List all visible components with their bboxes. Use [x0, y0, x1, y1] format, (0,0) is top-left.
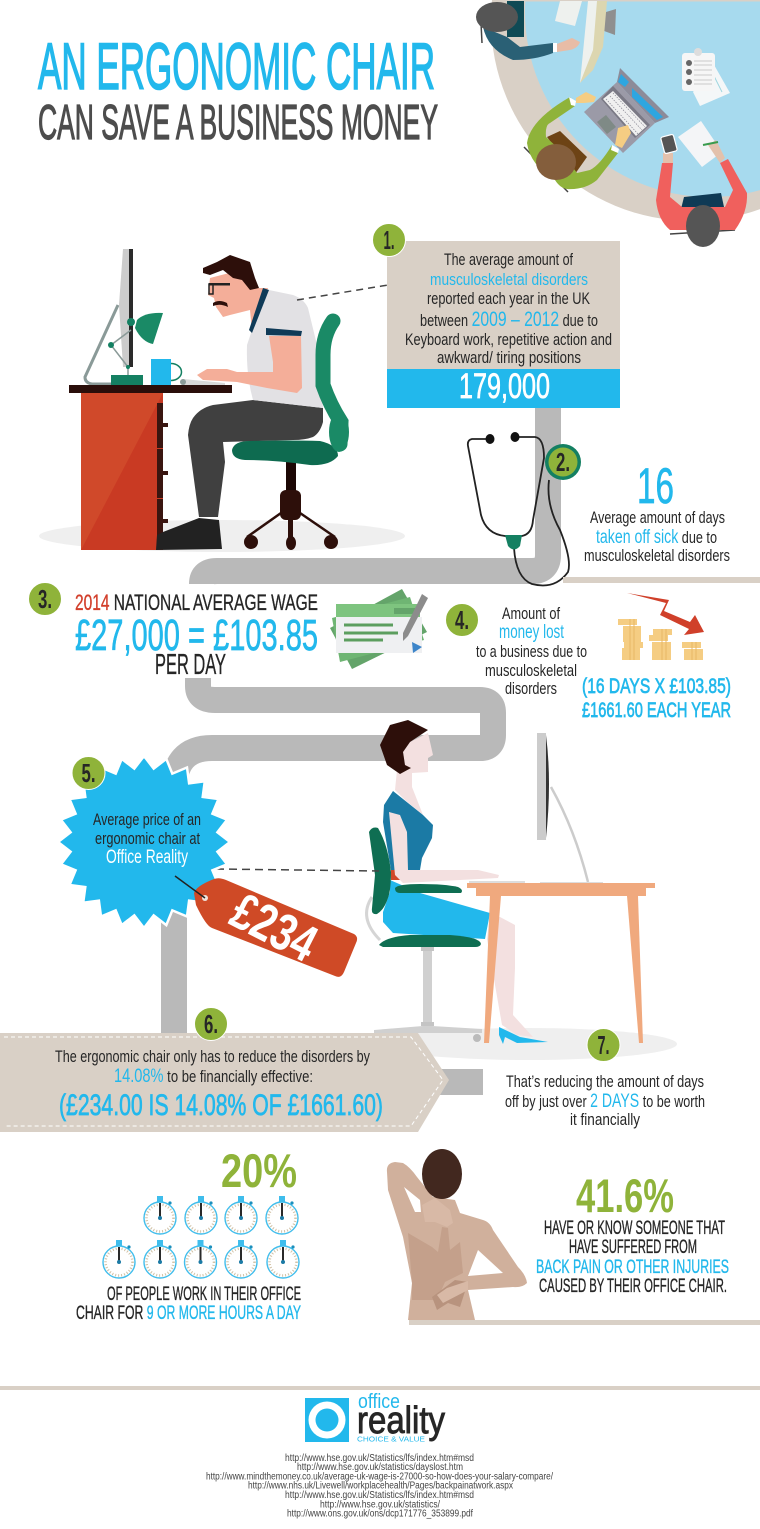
paper, pen and phone [661, 121, 725, 167]
text: reducing days off [505, 1072, 705, 1129]
pipe: stub after box 6 [440, 1069, 483, 1095]
burst text: Office Reality [106, 847, 188, 868]
statistic: national average wage [75, 590, 318, 681]
starburst [58, 756, 230, 928]
keyboard [180, 379, 225, 385]
badge 3: 3. [38, 584, 52, 614]
badge 4 [446, 604, 478, 636]
monitor [537, 733, 603, 884]
person in teal [476, 1, 580, 60]
price tag 234 [175, 876, 357, 977]
source list: http://www.ons.gov.uk/ons/dcp171776_353899.pdf [287, 1509, 473, 1520]
badge 7: 7. [598, 1030, 610, 1060]
panel: step 1 statistic [372, 224, 620, 408]
dashed leader from man to box 1 [297, 285, 388, 300]
statistic: national average wage: £27,000 = £103.85 [75, 611, 318, 660]
box text [405, 250, 612, 367]
box text: musculoskeletal disorders [430, 270, 588, 289]
divider under back figure [409, 1320, 760, 1325]
statistic: national average wage: 2014 NATIONAL AVERAGE WAGE [75, 590, 318, 615]
title [38, 29, 438, 150]
badge 1 [372, 224, 406, 256]
badge 6 [194, 1008, 228, 1040]
icon: stethoscope with badge 2 [468, 432, 581, 586]
desk lamp [108, 313, 163, 385]
text: money lost: to a business due to [476, 642, 587, 661]
chair base [244, 458, 338, 550]
statistic: 41.6 percent: 41.6% [576, 1169, 674, 1222]
person in green [524, 92, 631, 192]
icon: cheques and pen [330, 589, 428, 669]
box text: between 2009 – 2012 due to [420, 308, 598, 331]
statistic: national average wage: PER DAY [155, 649, 226, 681]
box text: Keyboard work, repetitive action and [405, 330, 612, 349]
box 6 text [55, 1047, 383, 1122]
illustration: man at a desk with poor posture [69, 249, 349, 550]
desk [467, 881, 655, 1043]
source list: http://www.hse.gov.uk/Statistics/lfs/index.htm#msd [285, 1453, 474, 1464]
burst text: ergonomic chair at [95, 829, 200, 848]
woman [380, 720, 548, 1044]
source list [206, 1453, 553, 1520]
pipe: connecting route from box 1 to step 3 [202, 405, 548, 584]
title: CAN SAVE A BUSINESS MONEY [38, 96, 438, 150]
badge 4: 4. [455, 605, 469, 635]
box text: The average amount of [444, 250, 573, 269]
mug [151, 359, 182, 385]
icon group: stopwatches [103, 1196, 299, 1278]
text: money lost: Amount of [502, 604, 560, 623]
price tag 234: £234 [222, 882, 326, 974]
burst text [93, 810, 201, 868]
logo: office reality [305, 1391, 445, 1444]
chair seat and backrest [232, 321, 349, 465]
monitor [85, 249, 133, 384]
text: money lost [476, 604, 587, 698]
badge 6: 6. [204, 1009, 218, 1039]
statistic: 1661.60 each year [582, 675, 731, 722]
text: reducing days off: it financially [570, 1110, 640, 1129]
text: hours in office chair [76, 1283, 301, 1324]
logo: office reality: reality [357, 1400, 445, 1442]
clipboard and report [682, 48, 730, 106]
floor shadow under woman's desk [379, 1028, 677, 1060]
statistic: 16 days: taken off sick due to [596, 527, 717, 548]
source list: http://www.nhs.uk/Livewell/workplacehealth/Pages/backpainatwork.aspx [248, 1481, 513, 1492]
laptop [584, 68, 669, 153]
badge 5 [72, 756, 105, 790]
statistic: 20 percent: 20% [221, 1144, 297, 1197]
text: money lost: musculoskeletal [485, 661, 577, 680]
box text: awkward/ tiring positions [437, 348, 581, 367]
box 6 text: (£234.00 IS 14.08% OF £1661.60) [59, 1089, 383, 1122]
floor shadow under man's desk [39, 520, 405, 552]
badge 7 [587, 1028, 620, 1062]
text: hours in office chair: OF PEOPLE WORK IN THEIR OFFICE [107, 1283, 301, 1305]
monitor on the table [555, 1, 616, 83]
box 6 text: The ergonomic chair only has to reduce the disorders by [55, 1047, 370, 1066]
panel: step 6 arrow box [0, 1008, 449, 1132]
source list: http://www.hse.gov.uk/statistics/ [320, 1499, 440, 1510]
pipe: connecting route from step 3 to box 6 [174, 678, 493, 1040]
badge 1: 1. [384, 225, 394, 255]
text: money lost: disorders [505, 679, 557, 698]
logo: office reality: office [358, 1391, 400, 1413]
chair seat and backrest [369, 828, 481, 947]
illustration: woman at a desk with good posture [367, 720, 655, 1044]
man [156, 255, 323, 550]
statistic: 16 days: 16 [637, 458, 674, 514]
badge 2: 2. [556, 447, 570, 477]
statistic: 41.6 percent [536, 1169, 729, 1297]
source list: http://www.mindthemoney.co.uk/average-uk-wage-is-27000-so-how-does-your-salary-compare/ [206, 1471, 553, 1482]
footer divider [0, 1386, 760, 1390]
statistic: 16 days [584, 458, 730, 565]
divider under 16 days [563, 577, 760, 583]
text: hours in office chair: CHAIR FOR 9 OR MORE HOURS A DAY [76, 1302, 301, 1324]
text: reducing days off: off by just over 2 DAYS to be worth [505, 1091, 705, 1112]
source list: http://www.hse.gov.uk/statistics/dayslost.htm [297, 1462, 463, 1473]
badge 3 [28, 582, 62, 616]
box text: reported each year in the UK [427, 289, 590, 308]
desk [69, 385, 232, 550]
person in red [656, 159, 747, 247]
logo: office reality: CHOICE & VALUE [357, 1436, 425, 1444]
burst text: Average price of an [93, 810, 201, 829]
text: money lost: money lost [499, 622, 565, 643]
illustration: person holding their back [387, 1149, 527, 1320]
source list: http://www.hse.gov.uk/Statistics/lfs/index.htm#msd [285, 1490, 474, 1501]
figure 179,000: 179,000 [459, 367, 550, 406]
badge 2 [545, 444, 581, 480]
dashed leader from price burst to chair [216, 869, 379, 871]
illustration: office meeting table from above [476, 0, 760, 247]
box 6 text: 14.08% to be financially effective: [114, 1066, 313, 1087]
icon: falling coin stacks [618, 593, 704, 660]
price burst: step 5 [58, 756, 230, 928]
chair post and base [367, 897, 482, 1042]
badge 5: 5. [82, 758, 96, 788]
